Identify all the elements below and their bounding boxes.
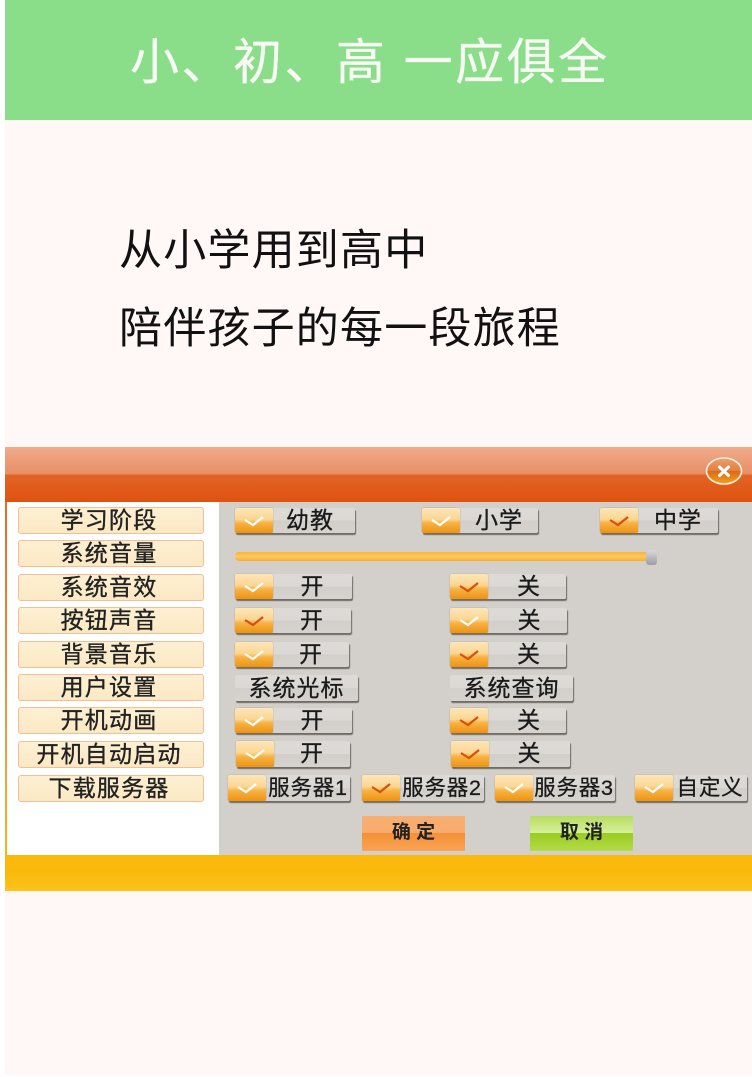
- label: study stage: 学习阶段: [61, 507, 157, 533]
- label: system volume: [18, 540, 204, 567]
- label: boot animation: [18, 707, 204, 734]
- toggle: button sound on: [235, 608, 351, 633]
- option: server 3: 服务器3: [534, 776, 614, 800]
- footer bar: [5, 855, 752, 891]
- option: primary school: 小学: [475, 507, 523, 533]
- option: custom: 自定义: [677, 776, 743, 800]
- toggle: sound effects off: 关: [517, 573, 541, 599]
- toggle: sound effects off: [450, 574, 566, 599]
- toggle: boot animation on: 开: [300, 707, 324, 733]
- slider handle: [646, 550, 657, 565]
- label: button sound: 按钮声音: [61, 607, 157, 633]
- label: user settings: [18, 674, 204, 701]
- button: confirm: [362, 816, 465, 851]
- button: cancel: 取 消: [560, 822, 603, 843]
- label: background music: 背景音乐: [61, 641, 157, 667]
- button: confirm: 确 定: [392, 822, 435, 843]
- body text block: 陪伴孩子的每一段旅程: [119, 305, 561, 353]
- title banner: [5, 0, 752, 120]
- window title bar: [5, 447, 752, 502]
- left column background: [7, 502, 219, 855]
- label: button sound: [18, 607, 204, 634]
- toggle: boot animation off: [450, 708, 566, 733]
- toggle: button sound on: 开: [300, 607, 324, 633]
- button: system cursor: 系统光标: [248, 675, 344, 701]
- option: preschool: 幼教: [286, 507, 334, 533]
- option: primary school: [422, 508, 538, 533]
- label: system sound effects: 系统音效: [61, 574, 157, 600]
- toggle: auto start off: [451, 741, 570, 767]
- toggle: boot animation off: 关: [517, 707, 541, 733]
- label: auto start: 开机自动启动: [36, 741, 182, 767]
- toggle: button sound off: 关: [518, 607, 542, 633]
- toggle: auto start off: 关: [518, 740, 542, 766]
- option: server 3: [495, 775, 615, 801]
- option: server 2: 服务器2: [402, 776, 482, 800]
- label: boot animation: 开机动画: [61, 707, 157, 733]
- label: download server: 下载服务器: [48, 775, 170, 801]
- option: secondary school: [600, 508, 718, 533]
- right content background: [219, 502, 752, 855]
- label: study stage: [18, 507, 204, 534]
- side menu labels: [18, 507, 204, 802]
- body text block: 从小学用到高中: [119, 227, 428, 275]
- toggle: music on: 开: [299, 641, 323, 667]
- toggle: auto start on: 开: [300, 740, 324, 766]
- slider track: [235, 552, 650, 561]
- toggle: boot animation on: [235, 708, 352, 733]
- option: server 1: [228, 775, 350, 801]
- toggle: music off: [450, 642, 566, 667]
- toggle: sound effects on: [235, 574, 352, 599]
- option: server 2: [362, 775, 484, 801]
- option: secondary school: 中学: [654, 507, 702, 533]
- toggle: sound effects on: 开: [300, 573, 324, 599]
- label: download server: [18, 775, 204, 802]
- toggle: button sound off: [450, 608, 567, 633]
- icon: close button: [706, 457, 742, 485]
- label: user settings: 用户设置: [61, 674, 157, 700]
- button: system query: 系统查询: [464, 675, 560, 701]
- toggle: music off: 关: [517, 641, 541, 667]
- body text block: [119, 227, 561, 353]
- toggle: auto start on: [236, 741, 350, 767]
- button: cancel: [530, 816, 633, 851]
- option: custom: [635, 775, 747, 801]
- title text: 小、初、高 一应俱全: [130, 36, 610, 90]
- label: background music: [18, 641, 204, 668]
- label: system sound effects: [18, 574, 204, 601]
- volume slider: [235, 550, 657, 565]
- option: server 1: 服务器1: [268, 776, 348, 800]
- panel: settings window: [5, 447, 752, 891]
- option: preschool: [235, 508, 355, 533]
- label: system volume: 系统音量: [61, 540, 157, 566]
- toggle: music on: [235, 642, 349, 667]
